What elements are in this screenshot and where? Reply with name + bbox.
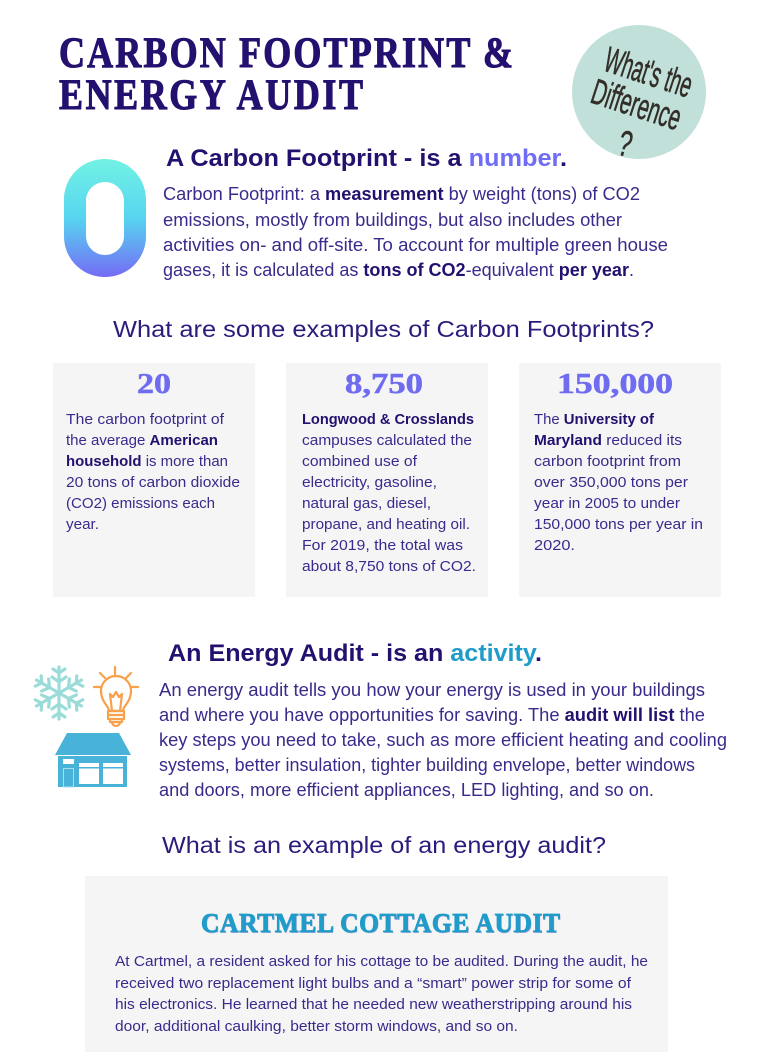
panel: 20: household is more than: [66, 454, 228, 470]
text: energy audit definition: [159, 680, 727, 800]
text: energy audit definition: An energy audit tells you how your energy is used in your buildings: [159, 680, 705, 700]
badge: What's the Difference?: ?: [614, 122, 637, 165]
panel: Cartmel cottage audit: his electronics. He learned that he needed new weatherstripping around his: [115, 996, 632, 1013]
panel: 150,000: 2020.: [534, 538, 575, 554]
panel: 150,000: carbon footprint from: [534, 454, 681, 470]
badge: What's the Difference?: [572, 25, 706, 165]
badge: What's the Difference?: What's the: [600, 39, 698, 105]
text: energy audit definition: and where you have opportunities for saving. The audit will list the: [159, 705, 705, 725]
panel: 20: 20 tons of carbon dioxide: [66, 475, 240, 491]
panel: 20: the average American: [66, 433, 218, 449]
panel: Cartmel cottage audit: door, additional caulking, better storm windows, and so on.: [115, 1018, 518, 1035]
heading: carbon footprint is a number: A Carbon Footprint - is a number.: [166, 145, 567, 172]
badge: What's the Difference?: Difference: [587, 71, 687, 138]
panel: Cartmel cottage audit: CARTMEL COTTAGE AUDIT: [202, 909, 561, 939]
panel: Cartmel cottage audit: At Cartmel, a resident asked for his cottage to be audited. During the audit, he: [115, 953, 648, 970]
title: ENERGY AUDIT: [59, 71, 363, 119]
panel: 8,750: Longwood & Crosslands: [302, 412, 474, 428]
panel: 8,750: propane, and heating oil.: [302, 517, 470, 533]
text: carbon footprint definition: activities on- and off-site. To account for multiple green house: [163, 235, 668, 255]
text: carbon footprint definition: gases, it is calculated as tons of CO2-equivalent per year.: [163, 260, 634, 280]
panel: 8,750: [286, 363, 488, 597]
panel: 20: The carbon footprint of: [66, 412, 225, 428]
subheading: examples of carbon footprints: What are some examples of Carbon Footprints?: [113, 316, 654, 342]
icon: gradient zero: [64, 159, 146, 277]
title: [59, 29, 513, 119]
panel: 8,750: For 2019, the total was: [302, 538, 463, 554]
text: carbon footprint definition: Carbon Footprint: a measurement by weight (tons) of CO2: [163, 184, 640, 204]
panel: 8,750: about 8,750 tons of CO2.: [302, 559, 476, 575]
panel: 20: year.: [66, 517, 99, 533]
panel: 150,000: Maryland reduced its: [534, 433, 682, 449]
panel: 8,750: 8,750: [345, 369, 423, 400]
panel: 20: (CO2) emissions each: [66, 496, 215, 512]
panel: 150,000: 150,000: [557, 369, 673, 400]
panel: Cartmel cottage audit: CARTMEL COTTAGE AUDIT: [201, 908, 560, 938]
panel: 20: 20: [137, 369, 171, 400]
panel: 8,750: electricity, gasoline,: [302, 475, 437, 491]
icon: light bulb: [94, 667, 138, 726]
panel: 8,750: campuses calculated the: [302, 433, 472, 449]
panel: 8,750: combined use of: [302, 454, 418, 470]
panel: 150,000: over 350,000 tons per: [534, 475, 688, 491]
panel: 150,000: 150,000 tons per year in: [534, 517, 703, 533]
heading: energy audit is an activity: An Energy Audit - is an activity.: [168, 640, 542, 667]
text: energy audit definition: systems, better insulation, tighter building envelope, better windows: [159, 755, 695, 775]
text: energy audit definition: and doors, more efficient appliances, LED lighting, and so on.: [159, 780, 654, 800]
icon: snowflake: [33, 667, 85, 719]
text: energy audit definition: key steps you need to take, such as more efficient heating and cooling: [159, 730, 727, 750]
icon: house: [55, 733, 131, 787]
subheading: example of an energy audit: What is an example of an energy audit?: [162, 832, 606, 858]
panel: 150,000: The University of: [534, 412, 654, 428]
panel: 150,000: year in 2005 to under: [534, 496, 680, 512]
panel: Cartmel cottage audit: received two replacement light bulbs and a “smart” power strip for some of: [115, 975, 632, 992]
panel: Cartmel cottage audit: [85, 876, 668, 1052]
panel: 8,750: natural gas, diesel,: [302, 496, 431, 512]
text: carbon footprint definition: emissions, mostly from buildings, but also includes other: [163, 210, 622, 230]
title: CARBON FOOTPRINT &: [59, 29, 513, 77]
text: carbon footprint definition: [163, 184, 668, 280]
panel: 20: [53, 363, 255, 597]
panel: 150,000: [519, 363, 721, 597]
